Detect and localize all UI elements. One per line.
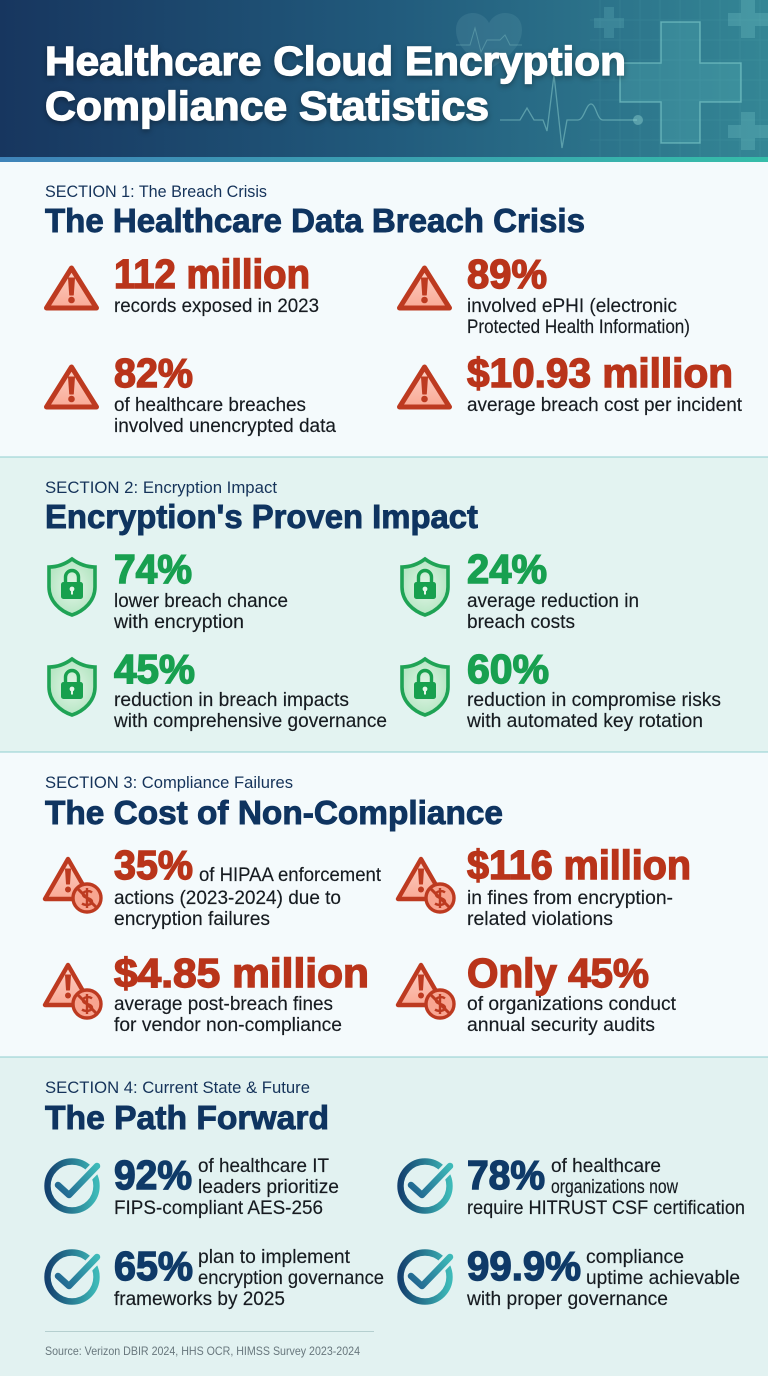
stat: 65%: encryption governance [198,1267,384,1289]
stat: 35%: 35% [114,842,193,888]
section 3 heading: The Cost of Non-Compliance [45,794,503,831]
stat: 92%: FIPS-compliant AES-256 [114,1197,323,1219]
stat: $116 million: related violations [467,908,613,930]
stat: 74%: with encryption [113,611,244,633]
stat: $4.85 million: $4.85 million [114,950,369,996]
stat: 99.9%: compliance [586,1246,684,1268]
stat: 45%: 45% [114,646,195,692]
stat: 65%: 65% [114,1243,193,1289]
stat: 89% [400,251,690,338]
stat: 78%: 78% [467,1152,545,1198]
stat: 78%: organizations now [551,1176,679,1198]
section 1 heading: The Healthcare Data Breach Crisis [45,202,585,239]
stat: 78%: of healthcare [551,1155,661,1177]
title: Healthcare Cloud Encryption [45,38,626,84]
stat: 65%: plan to implement [198,1246,351,1268]
stat: 112 million [46,251,319,317]
stat: 99.9%: with proper governance [466,1288,668,1310]
stat: 45%: with comprehensive governance [113,710,387,732]
stat: 24%: 24% [467,546,547,592]
stat: 92%: 92% [114,1152,192,1198]
header banner [0,0,768,157]
stat: Only 45%: annual security audits [467,1014,655,1036]
panel: section 3 non-compliance [0,752,768,1057]
stat: $10.93 million [400,350,743,416]
stat: 65%: frameworks by 2025 [114,1288,285,1310]
stat: 99.9% [400,1243,740,1310]
source line: Source: Verizon DBIR 2024, HHS OCR, HIMSS Survey 2023-2024 [45,1344,360,1358]
section 4 label: SECTION 4: Current State & Future [45,1079,310,1097]
section 4 heading: The Path Forward [45,1099,329,1136]
stat: 65% [48,1243,384,1310]
stat: 82% [46,350,336,437]
stat: $4.85 million [45,950,369,1036]
stat: 78%: require HITRUST CSF certification [467,1197,745,1219]
stat: 35%: encryption failures [114,908,270,930]
stat: 89%: 89% [467,251,547,297]
stat: 89%: involved ePHI (electronic [467,295,677,317]
header medical artwork [456,0,768,157]
stat: 24%: average reduction in [467,590,639,612]
title: Compliance Statistics [45,83,489,129]
stat: 35% [45,842,382,930]
stat: 99.9%: uptime achievable [586,1267,740,1289]
section 1 label: SECTION 1: The Breach Crisis [45,183,267,201]
section 2 label: SECTION 2: Encryption Impact [45,479,277,497]
stat: $10.93 million: average breach cost per incident [467,394,743,416]
stat: 60% [402,646,721,732]
stat: 45% [49,646,387,732]
stat: $4.85 million: for vendor non-compliance [114,1014,342,1036]
stat: 112 million: records exposed in 2023 [114,295,319,317]
stat: 45%: reduction in breach impacts [114,689,349,711]
stat: 60%: with automated key rotation [466,710,703,732]
stat: $116 million [398,842,691,930]
header accent strip [0,157,768,162]
stat: 82%: involved unencrypted data [114,415,336,437]
stat: 112 million: 112 million [114,251,310,297]
section 2 heading: Encryption's Proven Impact [45,498,478,535]
stat: 60%: reduction in compromise risks [467,689,721,711]
stat: Only 45%: of organizations conduct [467,993,677,1015]
stat: Only 45%: Only 45% [467,950,649,996]
panel: section 2 encryption impact [0,456,768,752]
stat: 92% [48,1152,339,1219]
stat: 60%: 60% [467,646,549,692]
stat: 74%: lower breach chance [114,590,288,612]
stat: Only 45% [398,950,677,1036]
panel: section 4 path forward [0,1056,768,1376]
stat: 89%: Protected Health Information) [467,316,690,338]
stat: 24%: breach costs [467,611,575,633]
stat: $116 million: $116 million [467,842,691,888]
stat: 82%: of healthcare breaches [114,394,306,416]
title [45,38,626,129]
stat: 35%: of HIPAA enforcement [199,864,382,886]
stat: $116 million: in fines from encryption- [467,887,673,909]
stat: 99.9%: 99.9% [467,1243,581,1289]
stat: 74% [49,546,288,633]
stat: 35%: actions (2023-2024) due to [114,887,341,909]
stat: 82%: 82% [114,350,193,396]
section 3 label: SECTION 3: Compliance Failures [45,774,293,792]
stat: 74%: 74% [114,546,192,592]
stat: $4.85 million: average post-breach fines [114,993,333,1015]
panel: section 1 breach crisis [0,162,768,457]
stat: $10.93 million: $10.93 million [467,350,733,396]
stat: 78% [400,1152,745,1219]
stat: 92%: leaders prioritize [198,1176,339,1198]
stat: 24% [402,546,639,633]
stat: 92%: of healthcare IT [198,1155,329,1177]
